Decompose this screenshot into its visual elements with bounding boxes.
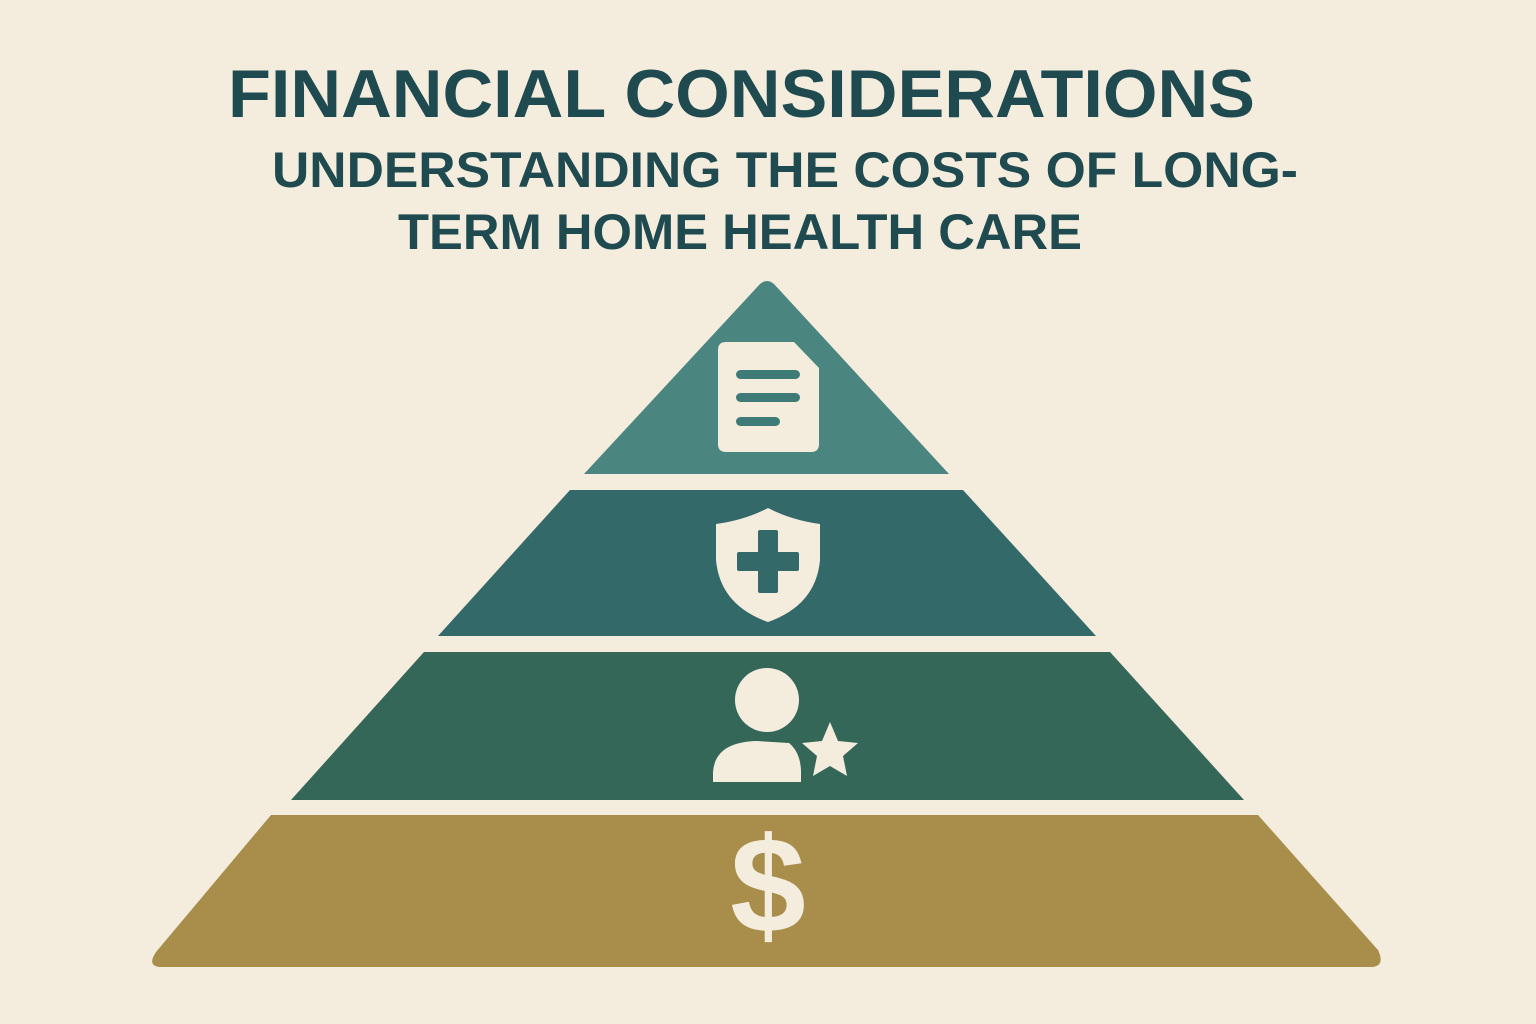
subtitle: UNDERSTANDING THE COSTS OF LONG- xyxy=(272,142,1298,198)
pyramid xyxy=(152,281,1381,967)
subtitle xyxy=(272,142,1298,260)
icon: document xyxy=(718,342,819,452)
tier 2: insurance xyxy=(438,490,1096,636)
icon: person with star xyxy=(713,668,858,782)
icon: dollar sign: $ xyxy=(730,809,806,961)
tier 3: caregiver xyxy=(291,652,1244,800)
tier 1: documents xyxy=(584,281,949,474)
subtitle: TERM HOME HEALTH CARE xyxy=(398,204,1082,260)
title: FINANCIAL CONSIDERATIONS xyxy=(228,56,1255,132)
icon: shield with cross xyxy=(716,508,820,622)
tier 4: cost xyxy=(152,809,1381,967)
